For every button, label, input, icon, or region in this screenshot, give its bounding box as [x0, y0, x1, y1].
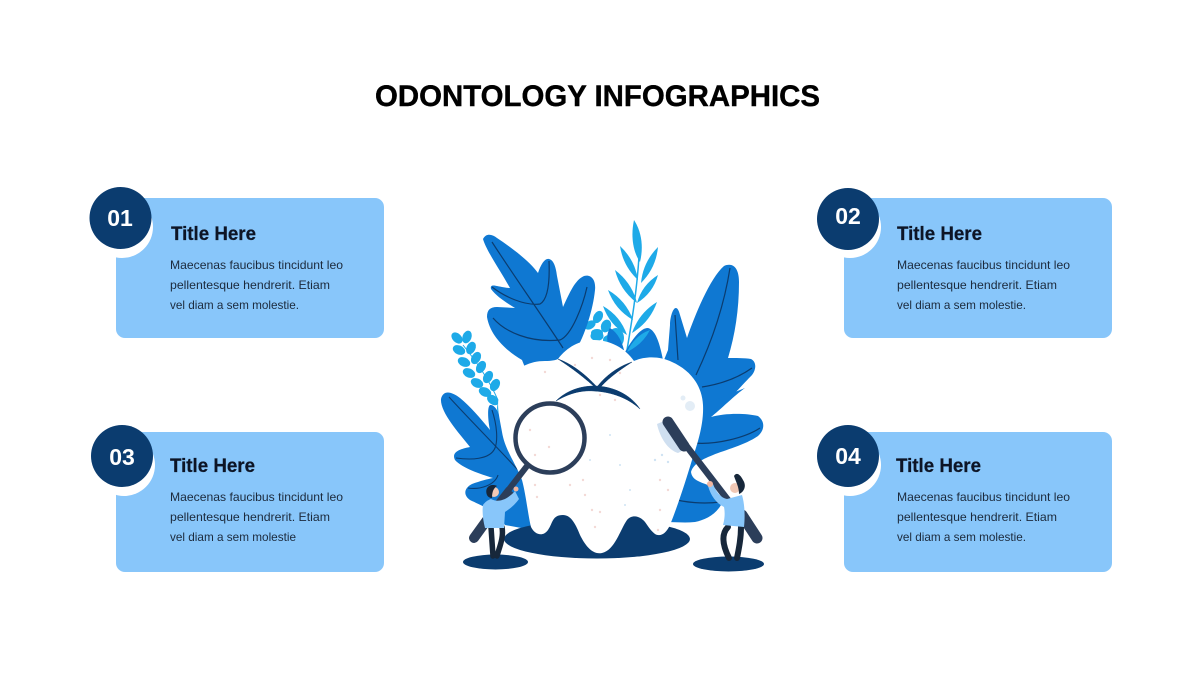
- icon: light blue sprig left: [449, 329, 503, 414]
- badge: 03: 03: [109, 444, 135, 470]
- text block: item 04: vel diam a sem molestie.: [897, 530, 1026, 544]
- panel: item 01: [90, 187, 384, 338]
- icon: tooth: [498, 340, 703, 553]
- shadow ellipse under tooth: [504, 508, 690, 558]
- badge: 01: 01: [107, 205, 133, 231]
- badge: 01: [90, 187, 152, 249]
- text block: item 02: vel diam a sem molestie.: [897, 298, 1026, 312]
- badge: 02: 02: [835, 203, 861, 229]
- text block: item 03: [170, 490, 343, 544]
- text block: item 01: [170, 258, 343, 312]
- icon: small blue leaf behind fern: [607, 328, 663, 365]
- icon: light blue sprig behind tooth: [583, 309, 624, 348]
- text block: item 04: Maecenas faucibus tincidunt leo: [897, 490, 1070, 504]
- text block: item 01: pellentesque hendrerit. Etiam: [170, 278, 330, 292]
- icon: right leaf upper: [660, 265, 755, 420]
- heading: item 01: Title Here: [171, 224, 256, 245]
- icon: top left oak leaf: [483, 235, 595, 380]
- text block: item 01: Maecenas faucibus tincidunt leo: [170, 258, 343, 272]
- text block: item 01: vel diam a sem molestie.: [170, 298, 299, 312]
- badge: 04: [817, 425, 879, 487]
- heading: item 03: Title Here: [170, 456, 255, 477]
- icon: left dentist: [483, 485, 519, 556]
- panel: item 04: [817, 425, 1112, 572]
- right person platform: [693, 556, 764, 572]
- badge: 04: 04: [835, 443, 861, 469]
- icon: right leaf lower: [667, 388, 763, 522]
- panel: item 03: [91, 425, 384, 572]
- heading: item 04: Title Here: [896, 456, 981, 477]
- icon: toothbrush: [668, 422, 758, 539]
- icon: fern: [603, 220, 658, 350]
- icon: right dentist: [707, 474, 745, 558]
- illustration: tooth with plants and dentists: [441, 220, 764, 572]
- title: ODONTOLOGY INFOGRAPHICS: [375, 80, 820, 113]
- text block: item 03: Maecenas faucibus tincidunt leo: [170, 490, 343, 504]
- text block: item 02: Maecenas faucibus tincidunt leo: [897, 258, 1070, 272]
- icon: magnifying glass: [474, 404, 584, 538]
- icon: bottom left leaf: [441, 392, 532, 530]
- badge: 03: [91, 425, 153, 487]
- text block: item 03: vel diam a sem molestie: [170, 530, 296, 544]
- text block: item 02: pellentesque hendrerit. Etiam: [897, 278, 1057, 292]
- badge: 02: [817, 188, 879, 250]
- text block: item 04: pellentesque hendrerit. Etiam: [897, 510, 1057, 524]
- text block: item 03: pellentesque hendrerit. Etiam: [170, 510, 330, 524]
- text block: item 02: [897, 258, 1070, 312]
- panel: item 02: [817, 188, 1112, 338]
- text block: item 04: [897, 490, 1070, 544]
- left person platform: [463, 554, 528, 570]
- icon: toothbrush bristles: [657, 421, 684, 453]
- tooth crown lines: [556, 359, 640, 409]
- heading: item 02: Title Here: [897, 224, 982, 245]
